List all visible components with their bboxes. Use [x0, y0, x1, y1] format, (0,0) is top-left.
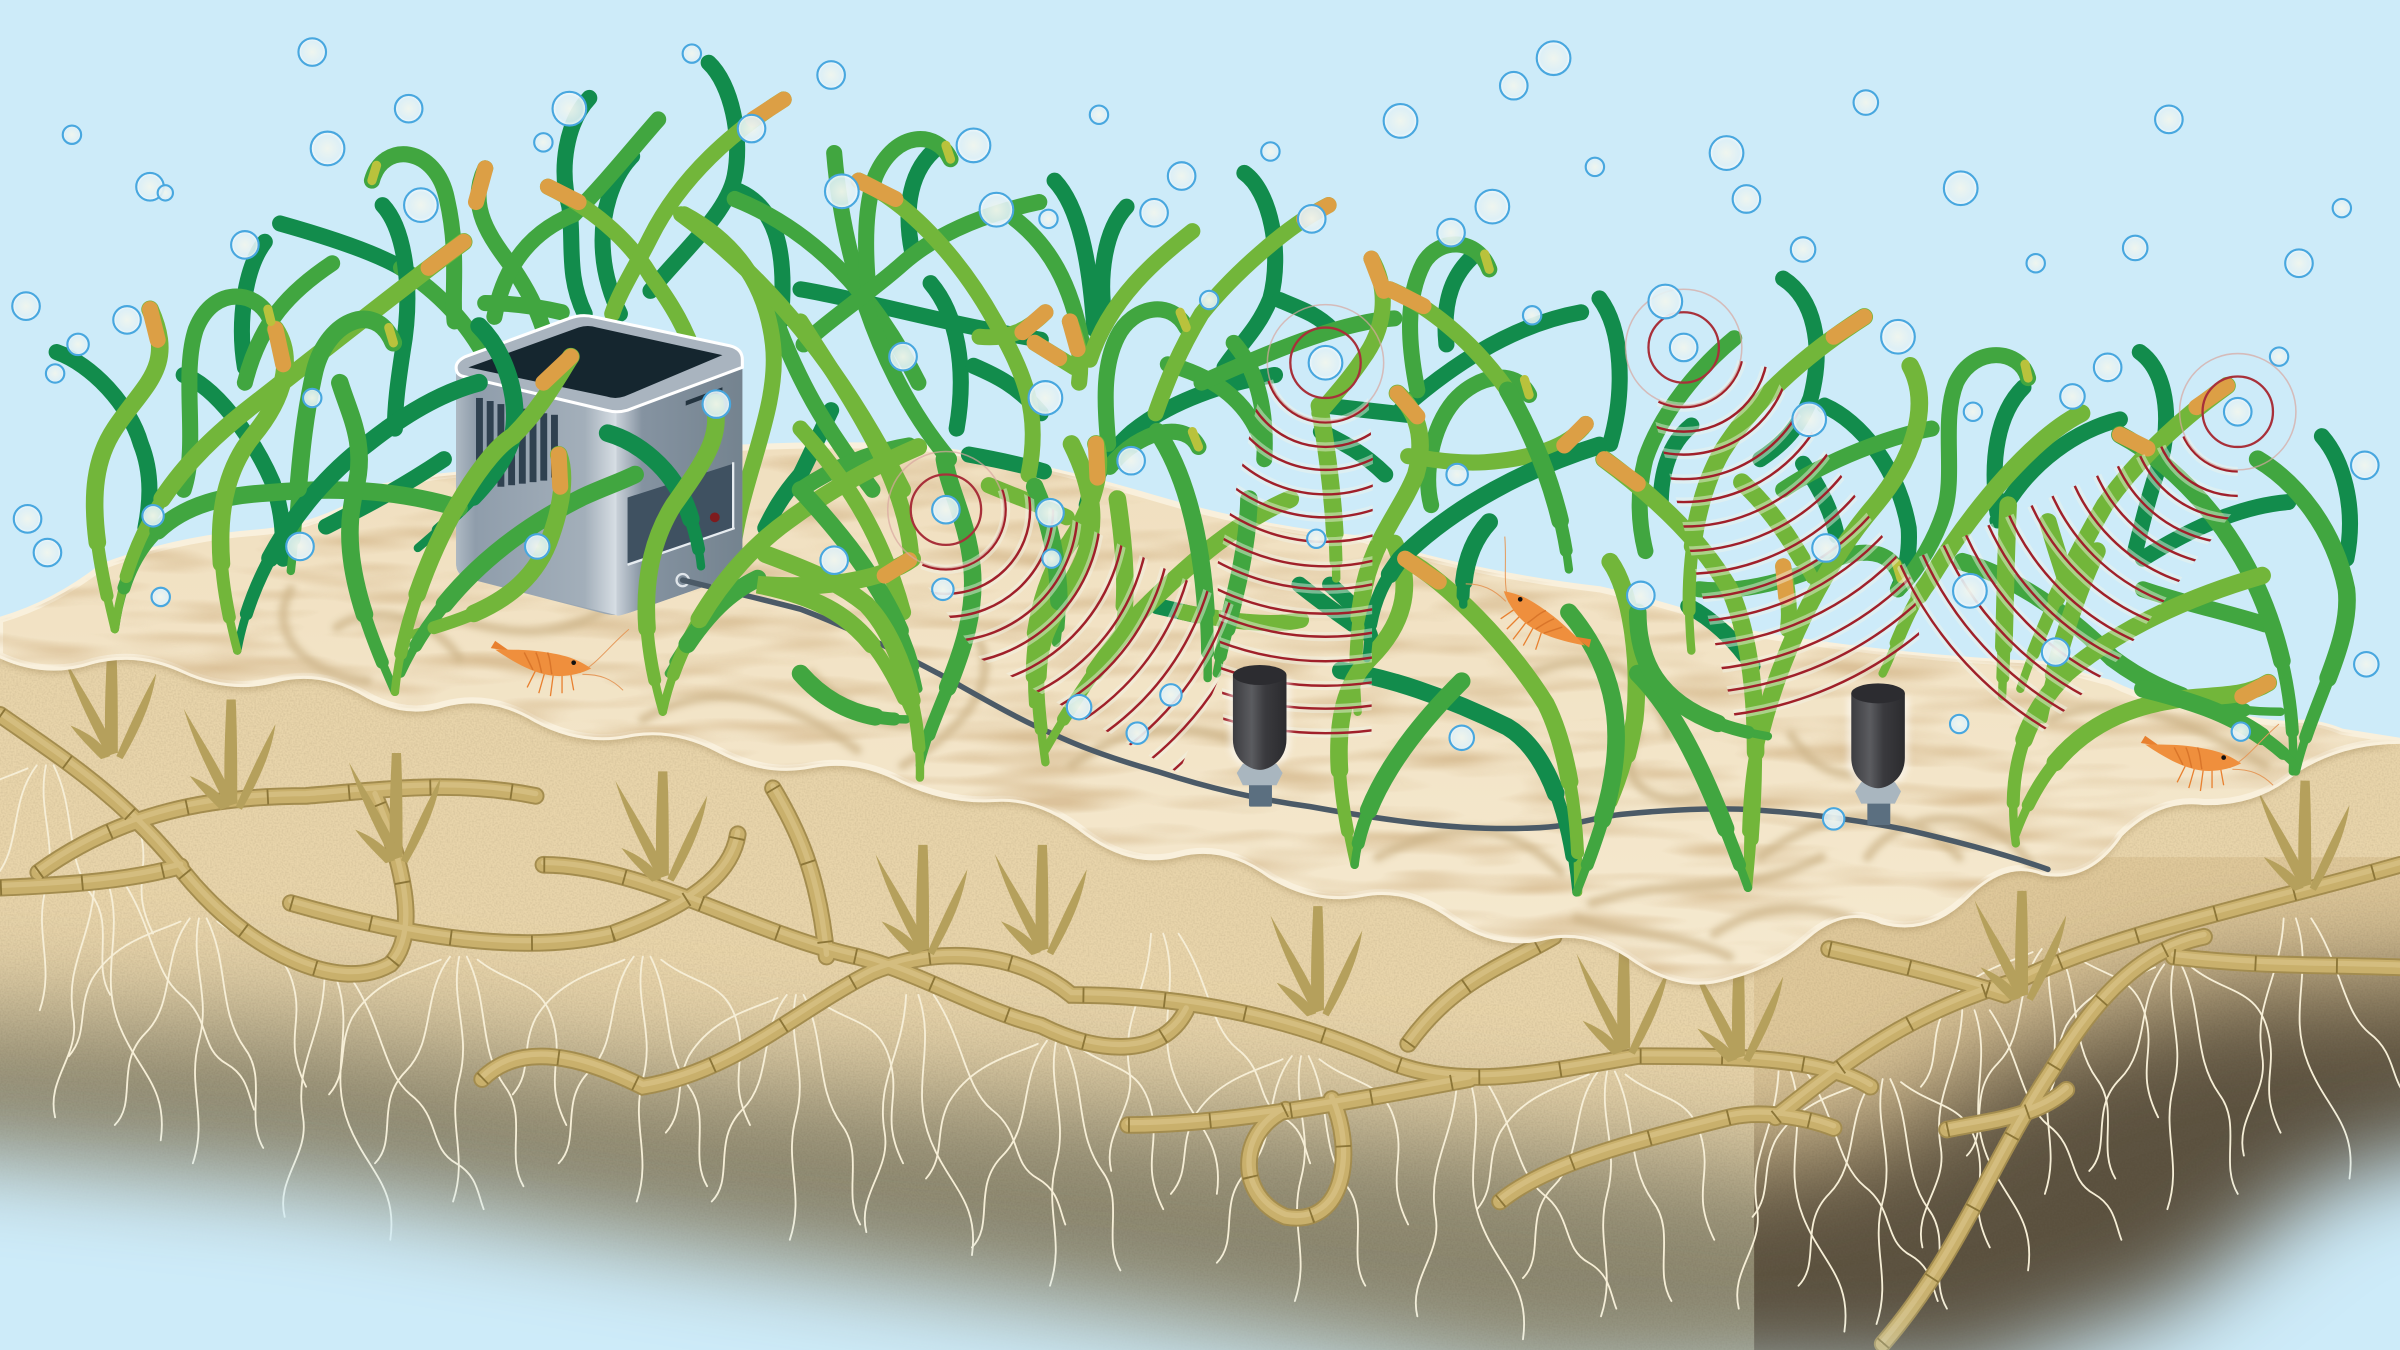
shrimp centre	[1457, 537, 1602, 682]
rhizome network	[0, 712, 2400, 1344]
shrimp right	[2141, 724, 2279, 791]
shrimp left	[491, 629, 629, 696]
roots	[0, 765, 2400, 1339]
acoustic signal arcs	[576, 0, 2296, 880]
blade shadows on sand	[283, 589, 2265, 957]
dark deep sediment, front face	[0, 948, 1754, 1350]
orange and yellow blade tips	[150, 99, 2268, 696]
speaker left	[1229, 665, 1290, 807]
bottom fade to water	[0, 1082, 2400, 1350]
right side face	[1754, 857, 2400, 1350]
buried shoot stubs	[64, 649, 2349, 1062]
sediment block	[0, 628, 2400, 1350]
dark deep sediment, right face	[1754, 857, 2400, 1350]
control panel	[628, 464, 733, 563]
bubbles	[12, 38, 2379, 830]
front seagrass plants	[95, 242, 2347, 892]
sand surface	[0, 436, 2400, 988]
monitoring box	[456, 316, 742, 616]
vents	[476, 398, 558, 487]
sediment grain	[0, 661, 2400, 1218]
sensor cable	[683, 580, 2048, 869]
speaker right	[1847, 683, 1909, 825]
back seagrass blades	[57, 63, 2350, 666]
